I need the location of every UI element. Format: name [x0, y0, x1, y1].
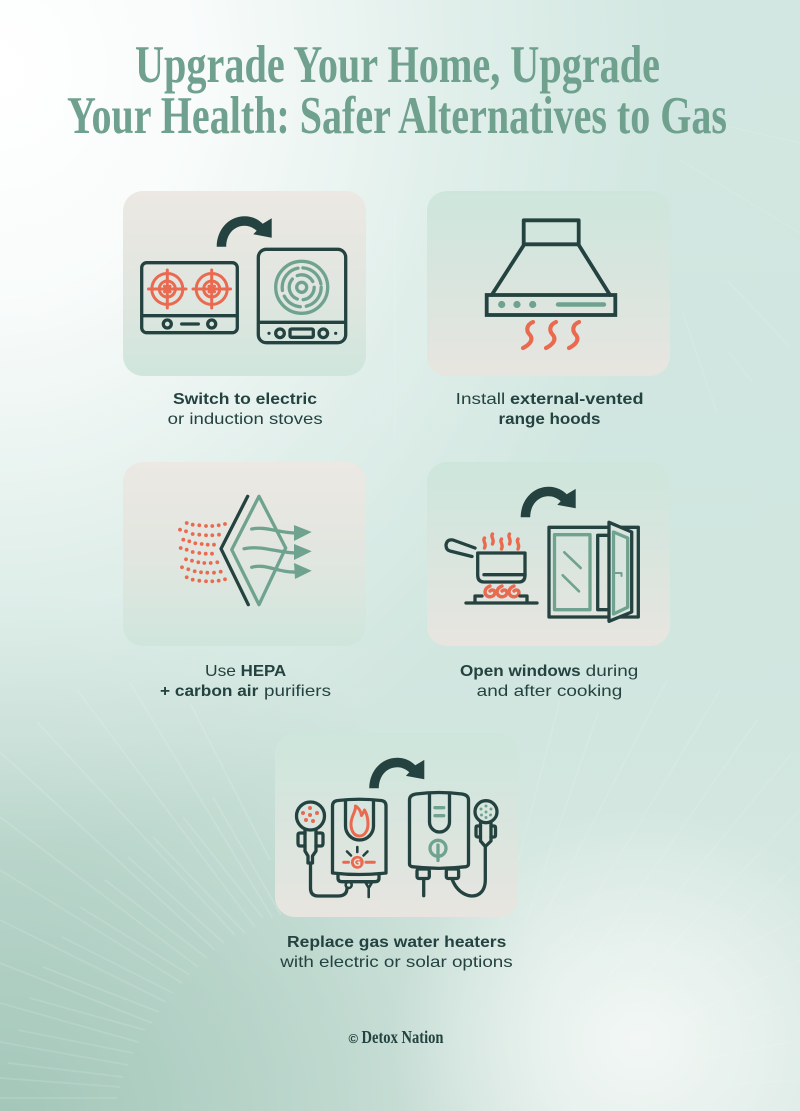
panel: open windows	[427, 462, 670, 700]
arrow: open the window	[521, 487, 576, 517]
caption: air purifiers	[160, 663, 331, 700]
icon: electric shower head	[452, 801, 497, 896]
caption: water heaters: Replace gas water heaters	[287, 934, 506, 951]
caption: switch to electric: Switch to electric	[173, 391, 317, 408]
icon: gas stove	[142, 263, 237, 333]
caption: water heaters: with electric or solar options	[279, 954, 513, 971]
caption: range hoods: Install	[456, 391, 505, 408]
caption: open windows	[460, 663, 638, 700]
icon: particle dots	[178, 521, 227, 583]
icon: pot on burner	[446, 534, 537, 603]
icon: open window	[549, 522, 638, 621]
panel: range hoods	[427, 191, 670, 428]
panel: electric or induction stoves	[123, 191, 366, 428]
logo: Detox Nation: ©	[348, 1031, 358, 1046]
icon: electric water heater	[410, 792, 468, 896]
arrow: switch to electric	[217, 216, 272, 247]
title	[67, 36, 727, 145]
logo: Detox Nation: Detox Nation	[362, 1027, 444, 1047]
caption: switch to electric	[168, 391, 323, 428]
caption: range hoods: range hoods	[498, 411, 601, 428]
icon: range hood	[487, 220, 615, 315]
caption: air purifiers: Use	[205, 663, 236, 680]
caption: open windows: and after cooking	[477, 683, 622, 700]
panel: air purifiers	[123, 462, 366, 700]
icon: clean air arrows	[244, 525, 312, 579]
caption: air purifiers: HEPA	[241, 663, 287, 680]
panel: water heaters	[275, 733, 518, 971]
caption: water heaters	[279, 934, 513, 971]
caption: switch to electric: or induction stoves	[168, 411, 323, 428]
icon: air filter	[221, 496, 286, 605]
caption: air purifiers: purifiers	[264, 683, 331, 700]
caption: range hoods: external-vented	[510, 391, 644, 408]
arrow: replace heater	[369, 758, 424, 788]
caption: range hoods	[456, 391, 644, 428]
caption: air purifiers: + carbon air	[160, 683, 258, 700]
icon: induction stove	[258, 249, 346, 343]
icon: rising fumes	[523, 322, 579, 348]
icon: gas shower head	[296, 802, 347, 896]
caption: open windows: during	[586, 663, 638, 680]
caption: open windows: Open windows	[460, 663, 581, 680]
icon: gas water heater	[332, 799, 386, 897]
